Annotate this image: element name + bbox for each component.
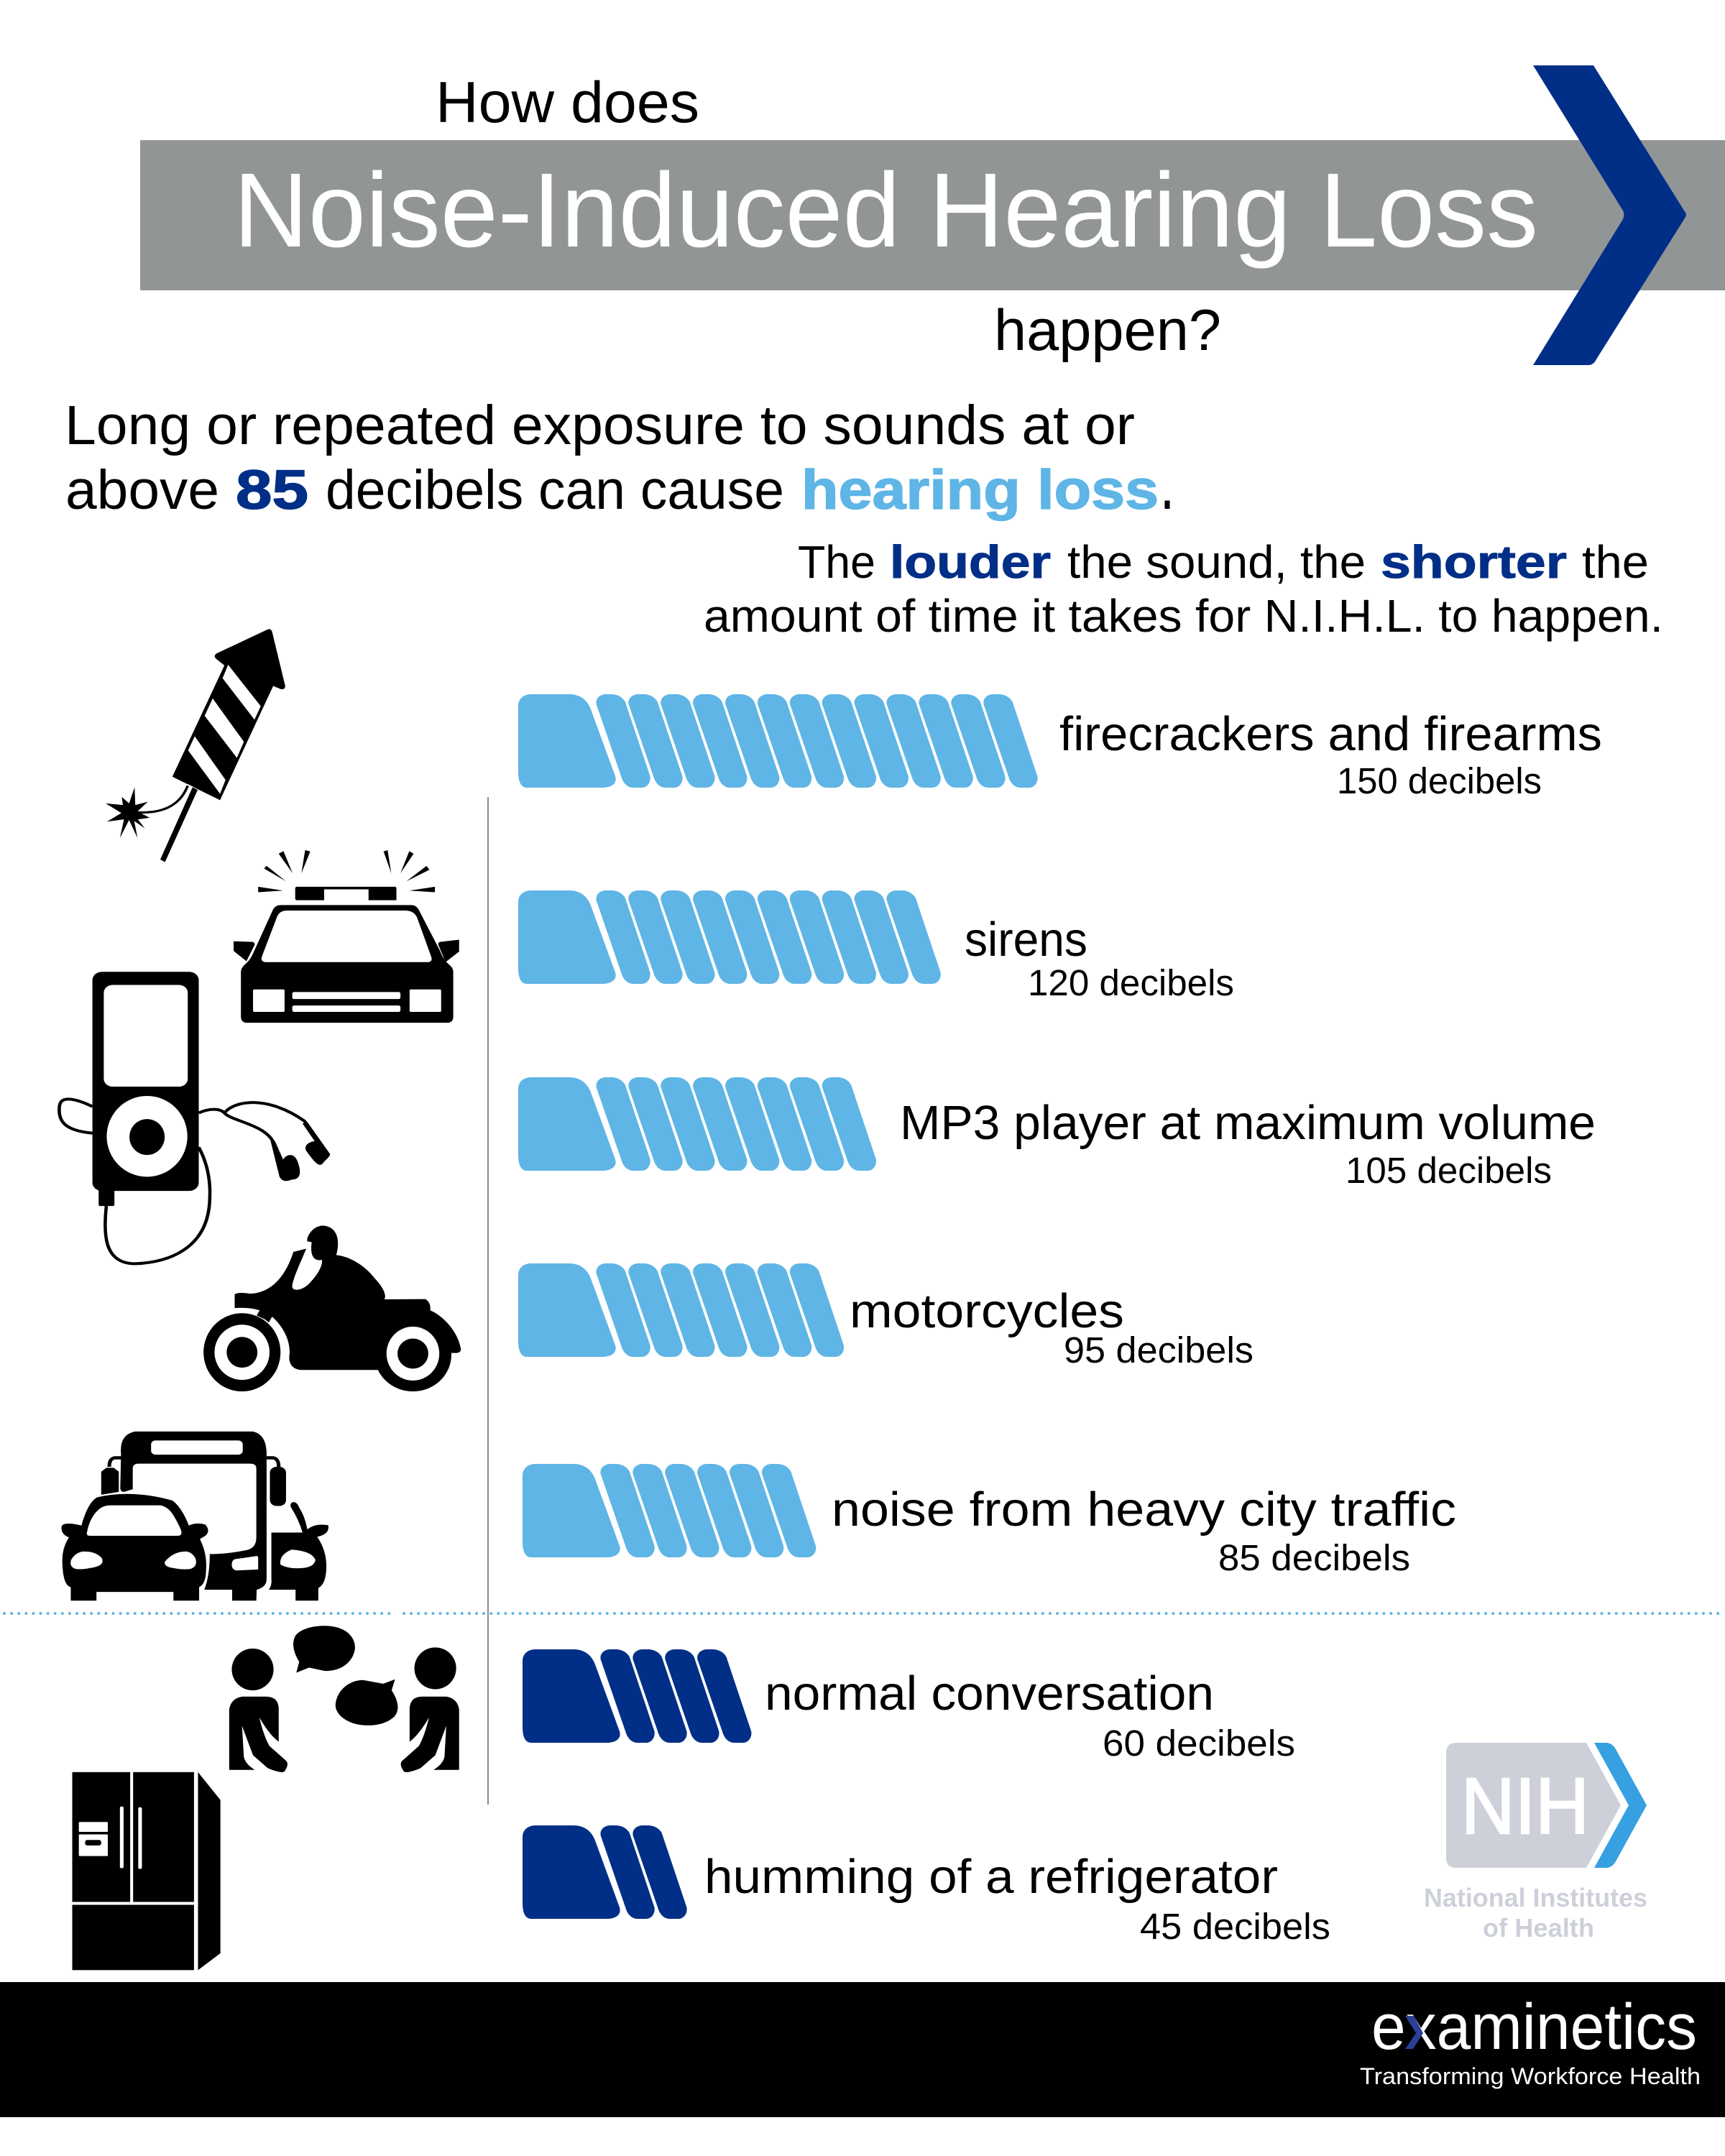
label: firecrackers and firearms bbox=[1059, 707, 1602, 761]
intro line 2: . bbox=[1162, 459, 1172, 521]
bar: 105 decibels bbox=[518, 1077, 876, 1171]
secondary statement bbox=[704, 536, 1663, 642]
intro line 2 bbox=[65, 459, 1172, 521]
examinetics wordmark: examinetics bbox=[1371, 1991, 1697, 2063]
label: noise from heavy city traffic bbox=[832, 1483, 1456, 1537]
label: normal conversation bbox=[765, 1667, 1214, 1720]
statement line 1: the bbox=[1582, 536, 1649, 588]
chevron arrow bbox=[1533, 65, 1686, 365]
bar: 120 decibels bbox=[518, 890, 941, 984]
intro line 2: hearing loss bbox=[801, 459, 1159, 521]
icon: heavy traffic bbox=[62, 1432, 328, 1600]
statement line 1: shorter bbox=[1381, 536, 1567, 588]
decibel value: 95 decibels bbox=[1064, 1330, 1254, 1370]
statement line 1 bbox=[798, 536, 1649, 588]
decibel value: 85 decibels bbox=[1218, 1537, 1410, 1578]
row: sirens bbox=[518, 890, 1234, 1003]
label: MP3 player at maximum volume bbox=[900, 1096, 1596, 1150]
grey banner bbox=[140, 140, 1725, 290]
icon: motorcycle rider bbox=[203, 1225, 461, 1391]
icon: police car bbox=[234, 850, 459, 1023]
85 decibel threshold dotted line bbox=[4, 1612, 1725, 1615]
icon: MP3 player with earbuds bbox=[59, 972, 330, 1263]
NIH name bbox=[1424, 1883, 1647, 1943]
row: firecrackers and firearms bbox=[518, 694, 1602, 801]
statement line 1: The bbox=[798, 536, 875, 588]
label: humming of a refrigerator bbox=[704, 1850, 1278, 1904]
NIH letters: NIH bbox=[1461, 1762, 1589, 1851]
row: motorcycles bbox=[518, 1263, 1254, 1370]
bar: 150 decibels bbox=[518, 694, 1038, 788]
intro statement bbox=[65, 395, 1172, 521]
icon: two people talking bbox=[229, 1626, 459, 1772]
banner title: Noise-Induced Hearing Loss bbox=[234, 152, 1538, 270]
tagline: Transforming Workforce Health bbox=[1360, 2063, 1701, 2089]
footer bar bbox=[0, 1982, 1725, 2117]
NIH logo bbox=[1424, 1743, 1647, 1943]
row: normal conversation bbox=[523, 1649, 1295, 1764]
NIH blue chevron bbox=[1594, 1743, 1647, 1868]
bar: 60 decibels bbox=[523, 1649, 751, 1743]
decibel value: 60 decibels bbox=[1103, 1723, 1295, 1764]
decibel value: 105 decibels bbox=[1346, 1150, 1552, 1191]
decibel value: 150 decibels bbox=[1337, 760, 1542, 801]
intro line 2: decibels can cause bbox=[326, 459, 784, 521]
NIH name: of Health bbox=[1483, 1913, 1594, 1943]
title intro: How does: How does bbox=[436, 70, 699, 135]
row: MP3 player bbox=[518, 1077, 1596, 1191]
title banner bbox=[140, 65, 1725, 365]
label: motorcycles bbox=[850, 1284, 1124, 1338]
bar: 85 decibels bbox=[523, 1464, 816, 1557]
decibel value: 120 decibels bbox=[1028, 962, 1234, 1003]
row: heavy city traffic bbox=[523, 1464, 1456, 1578]
black band bbox=[0, 1982, 1725, 2117]
intro line 1: Long or repeated exposure to sounds at or bbox=[65, 395, 1135, 456]
icon: firework rocket bbox=[106, 629, 285, 862]
decibel value: 45 decibels bbox=[1140, 1906, 1330, 1947]
row: humming of a refrigerator bbox=[523, 1825, 1330, 1947]
NIH name: National Institutes bbox=[1424, 1883, 1647, 1912]
icon: refrigerator bbox=[73, 1772, 221, 1970]
intro line 2: above bbox=[65, 459, 219, 521]
label: sirens bbox=[965, 913, 1087, 967]
statement line 1: louder bbox=[890, 536, 1051, 588]
title outro: happen?: happen? bbox=[994, 298, 1221, 363]
vertical axis line bbox=[487, 797, 489, 1805]
bar: 45 decibels bbox=[523, 1825, 687, 1919]
NIH grey tag bbox=[1446, 1743, 1621, 1868]
statement line 1: the sound, the bbox=[1067, 536, 1366, 588]
bar: 95 decibels bbox=[518, 1263, 844, 1357]
statement line 2: amount of time it takes for N.I.H.L. to happen. bbox=[704, 590, 1663, 642]
wordmark blue x accent bbox=[1405, 2016, 1423, 2049]
intro line 2: 85 bbox=[236, 459, 308, 521]
